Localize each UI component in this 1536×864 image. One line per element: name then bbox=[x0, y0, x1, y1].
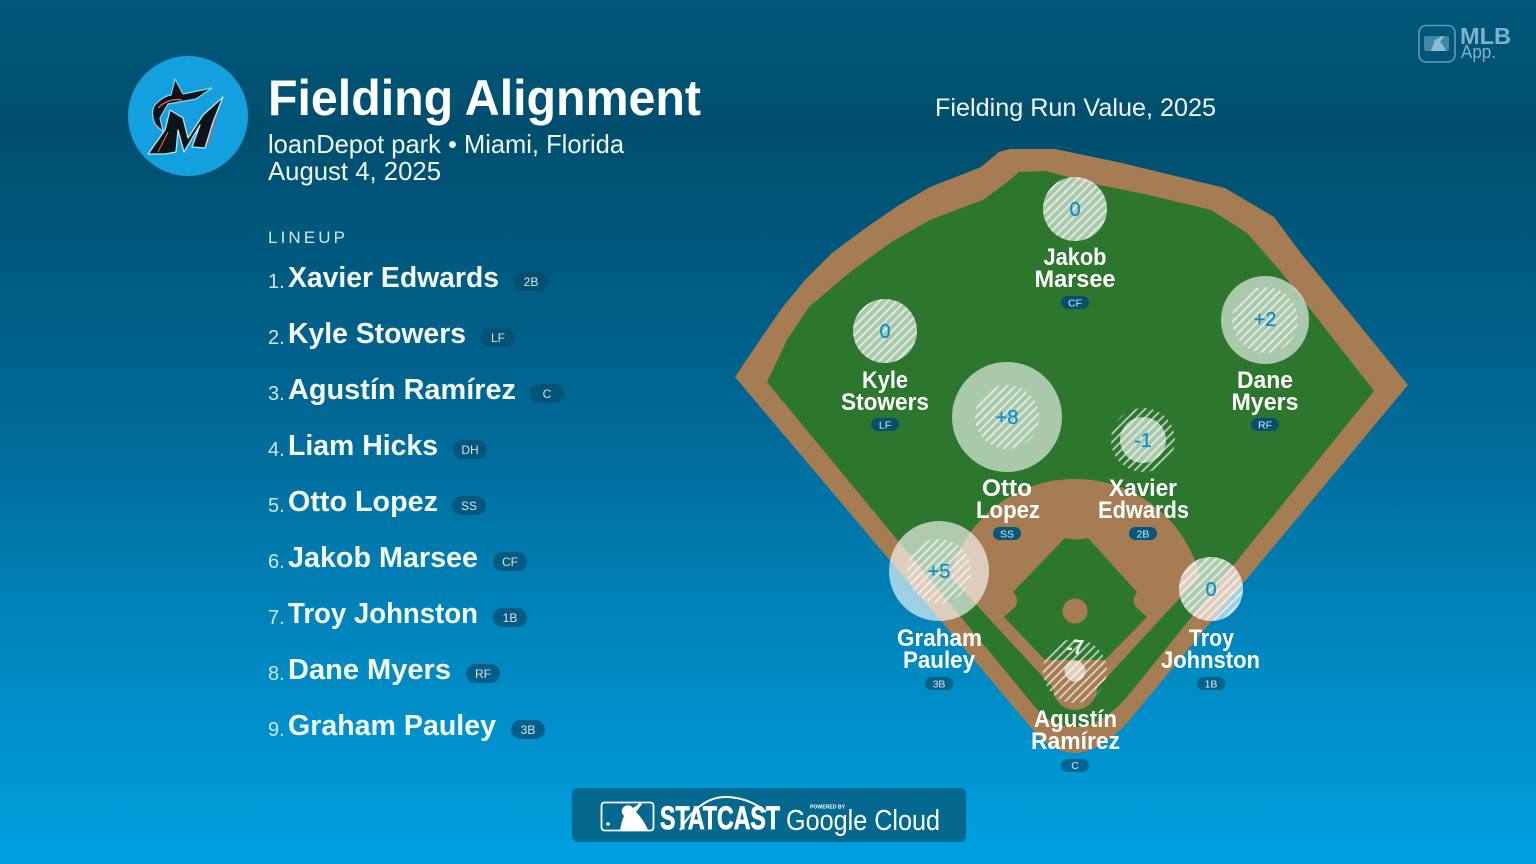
lineup row 5: 5. bbox=[268, 495, 285, 517]
lineup row 5: SS bbox=[461, 499, 477, 513]
lineup row 8: Dane Myers bbox=[288, 654, 451, 686]
lineup row 3: C bbox=[543, 387, 552, 401]
lineup row 4: Liam Hicks bbox=[288, 430, 438, 462]
chart title: Fielding Run Value, 2025 bbox=[935, 94, 1216, 122]
lineup row 4 bbox=[268, 430, 487, 462]
position marker: Dane Myers: Myers bbox=[1232, 389, 1298, 416]
MLB App logo: App. bbox=[1461, 42, 1496, 62]
powered by label: POWERED BY bbox=[810, 804, 846, 810]
lineup heading: LINEUP bbox=[268, 228, 345, 247]
lineup row 5 bbox=[268, 486, 486, 518]
position marker: Xavier Edwards: Edwards bbox=[1098, 497, 1189, 524]
position marker: Kyle Stowers: Kyle bbox=[862, 367, 908, 394]
position marker: Dane Myers: RF bbox=[1258, 420, 1272, 432]
Statcast wordmark: STATCAST bbox=[660, 800, 780, 836]
MLB App logo: MLB bbox=[1460, 23, 1511, 49]
team logo: Marlins bbox=[128, 56, 248, 176]
position marker: Xavier Edwards: Xavier bbox=[1109, 475, 1177, 502]
infield dirt bbox=[950, 479, 1200, 710]
position marker: Troy Johnston: Troy bbox=[1189, 625, 1235, 652]
icon: MLB logo bbox=[602, 802, 654, 830]
Statcast footer badge bbox=[572, 788, 966, 842]
MLB App logo bbox=[1419, 23, 1511, 62]
lineup row 8: 8. bbox=[268, 663, 285, 685]
position marker: Jakob Marsee bbox=[1034, 177, 1116, 310]
position marker: Dane Myers: +2 bbox=[1254, 309, 1276, 331]
position marker: Jakob Marsee: CF bbox=[1068, 298, 1082, 310]
lineup list bbox=[268, 262, 564, 742]
position marker: Jakob Marsee: Marsee bbox=[1034, 266, 1116, 293]
outfield grass bbox=[767, 171, 1374, 727]
position marker: Dane Myers bbox=[1221, 276, 1309, 432]
lineup row 6: Jakob Marsee bbox=[288, 542, 478, 574]
title: Fielding Alignment bbox=[268, 70, 701, 126]
position marker: Troy Johnston bbox=[1161, 557, 1260, 690]
position marker: Agustín Ramírez bbox=[1031, 637, 1120, 772]
position marker: Xavier Edwards: 2B bbox=[1137, 528, 1149, 540]
lineup row 7: 1B bbox=[503, 611, 517, 625]
position marker: Agustín Ramírez: Ramírez bbox=[1031, 728, 1120, 755]
position marker: Kyle Stowers: LF bbox=[879, 420, 891, 432]
Statcast arc bbox=[680, 797, 766, 830]
subtitle: venue: loanDepot park • Miami, Florida bbox=[268, 129, 625, 159]
position marker: Jakob Marsee: Jakob bbox=[1044, 244, 1106, 271]
lineup row 3: 3. bbox=[268, 383, 285, 405]
position marker: Otto Lopez: Otto bbox=[982, 475, 1032, 502]
position marker: Agustín Ramírez: -7 bbox=[1066, 637, 1084, 659]
lineup row 2: LF bbox=[491, 331, 505, 345]
position marker: Troy Johnston: 1B bbox=[1205, 678, 1217, 690]
warning track bbox=[735, 149, 1408, 753]
position marker: Otto Lopez: +8 bbox=[996, 407, 1018, 429]
position marker: Troy Johnston: Johnston bbox=[1161, 647, 1260, 674]
lineup row 9: 9. bbox=[268, 719, 285, 741]
lineup row 6: 6. bbox=[268, 551, 285, 573]
Google Cloud wordmark: Google Cloud bbox=[786, 805, 940, 837]
lineup row 4: 4. bbox=[268, 439, 285, 461]
position marker: Kyle Stowers: 0 bbox=[879, 321, 891, 343]
position marker: Otto Lopez: Lopez bbox=[976, 497, 1040, 524]
lineup row 8: RF bbox=[475, 667, 491, 681]
pitcher's mound bbox=[1062, 598, 1088, 624]
position marker: Kyle Stowers bbox=[841, 299, 929, 432]
position marker: Otto Lopez: SS bbox=[1000, 528, 1014, 540]
lineup row 5: Otto Lopez bbox=[288, 486, 438, 518]
position marker: Graham Pauley: Pauley bbox=[903, 647, 976, 674]
infield grass bbox=[1004, 538, 1147, 660]
position marker: Agustín Ramírez: C bbox=[1071, 760, 1079, 772]
position marker: Graham Pauley: 3B bbox=[933, 678, 945, 690]
lineup row 4: DH bbox=[461, 443, 479, 457]
lineup row 1: 1. bbox=[268, 271, 285, 293]
position marker: Graham Pauley: +5 bbox=[928, 561, 950, 583]
lineup row 1: 2B bbox=[524, 275, 538, 289]
lineup row 6: CF bbox=[502, 555, 518, 569]
lineup row 9: 3B bbox=[521, 723, 535, 737]
position marker: Xavier Edwards: -1 bbox=[1134, 430, 1152, 452]
position marker: Troy Johnston: 0 bbox=[1205, 579, 1217, 601]
position marker: Xavier Edwards bbox=[1098, 408, 1189, 540]
position marker: Agustín Ramírez: Agustín bbox=[1034, 706, 1117, 733]
lineup row 7: Troy Johnston bbox=[288, 598, 478, 630]
baseball field bbox=[735, 149, 1408, 753]
position marker: Otto Lopez bbox=[952, 362, 1062, 540]
position marker: Jakob Marsee: 0 bbox=[1069, 199, 1081, 221]
lineup row 2: 2. bbox=[268, 327, 285, 349]
lineup row 1: Xavier Edwards bbox=[288, 262, 499, 294]
subtitle: date: August 4, 2025 bbox=[268, 156, 441, 186]
position marker: Graham Pauley: Graham bbox=[897, 625, 982, 652]
position marker: Dane Myers: Dane bbox=[1237, 367, 1293, 394]
lineup row 2: Kyle Stowers bbox=[288, 318, 466, 350]
position marker: Graham Pauley bbox=[889, 521, 989, 690]
lineup row 7: 7. bbox=[268, 607, 285, 629]
position marker: Kyle Stowers: Stowers bbox=[841, 389, 929, 416]
lineup row 9: Graham Pauley bbox=[288, 710, 496, 742]
lineup row 3: Agustín Ramírez bbox=[288, 374, 516, 406]
